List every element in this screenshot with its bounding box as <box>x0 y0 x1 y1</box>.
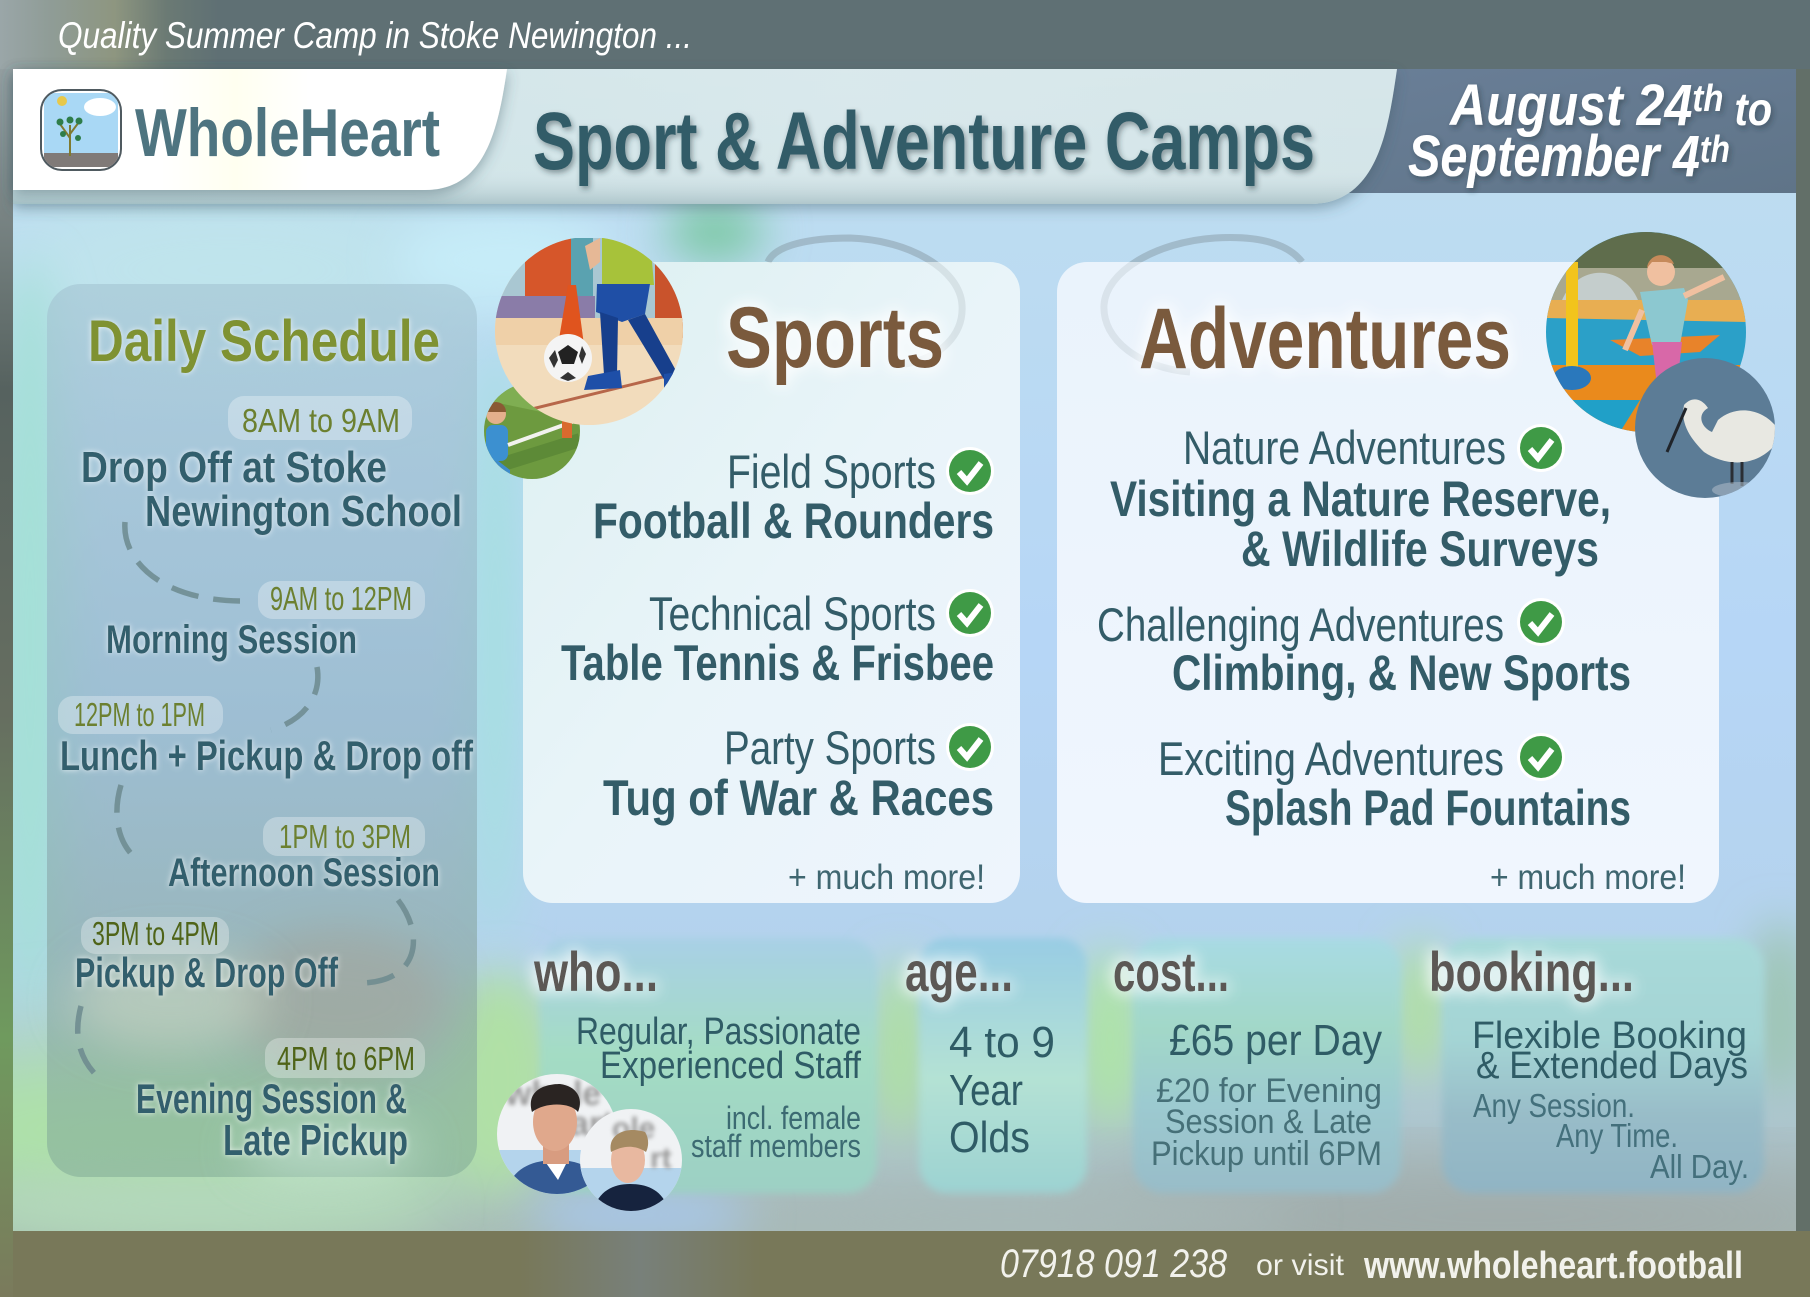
adventures: nature <box>1110 421 1611 577</box>
title: Sport & Adventure Camps <box>533 96 1315 187</box>
photo: staff member two: rt <box>650 1142 672 1175</box>
age: text: Year <box>949 1066 1023 1115</box>
cost: text <box>1151 1016 1382 1173</box>
age: text: Olds <box>949 1113 1030 1162</box>
photo: tug of war <box>484 383 580 479</box>
date text: August 24 <box>1450 73 1730 138</box>
schedule: 8AM: 8AM to 9AM <box>242 402 400 439</box>
photo: staff member one <box>496 1074 618 1196</box>
schedule: 8AM: Drop Off at Stoke <box>81 443 387 492</box>
who: staff <box>576 1011 861 1164</box>
who: staff: incl. female <box>726 1100 861 1136</box>
heading: age: age... <box>905 940 1013 1003</box>
photo: staff member one: art <box>570 1105 613 1143</box>
panel: daily schedule <box>47 284 477 1180</box>
schedule: 9AM: Morning Session <box>106 618 357 662</box>
icon: check marks adventures <box>1517 424 1565 781</box>
who: staff: Experienced Staff <box>600 1045 861 1087</box>
icon: check marks sports <box>946 447 994 771</box>
title band <box>13 69 1397 204</box>
panel: age <box>905 938 1087 1193</box>
age: text <box>949 1018 1055 1162</box>
sports: party <box>603 721 994 826</box>
heading: adventures: Adventures <box>1139 291 1511 387</box>
photo: football <box>495 238 685 426</box>
adventures: nature: Nature Adventures <box>1183 421 1506 474</box>
schedule: 4PM: Late Pickup <box>223 1116 408 1165</box>
footer contact: or visit <box>1256 1249 1345 1282</box>
photo: egret <box>1635 358 1775 498</box>
booking: text: Any Time. <box>1556 1117 1678 1154</box>
schedule: 1PM <box>168 817 440 895</box>
sports: party: Tug of War & Races <box>603 770 994 826</box>
schedule: 1PM: Afternoon Session <box>168 851 440 895</box>
schedule: 8AM: Newington School <box>145 487 462 536</box>
photo: staff member two <box>580 1108 684 1216</box>
background: inner gradient panel <box>13 193 1796 1231</box>
adventures: challenging: Climbing, & New Sports <box>1172 645 1631 701</box>
date text: th <box>1700 129 1730 171</box>
heading: daily schedule: Daily Schedule <box>88 309 440 374</box>
logo tab <box>13 69 507 190</box>
adventures: exciting: Exciting Adventures <box>1158 732 1504 785</box>
adventures: much more: + much more! <box>1490 858 1686 897</box>
heading: booking: booking... <box>1429 940 1634 1003</box>
adventures: nature: & Wildlife Surveys <box>1241 521 1599 577</box>
sports: much more: + much more! <box>788 858 985 897</box>
photo: staff member one: whole <box>504 1075 601 1113</box>
footer contact: 07918 091 238 <box>1000 1242 1228 1286</box>
logo wordmark: WholeHeart <box>135 95 440 171</box>
schedule: 12PM <box>58 696 474 779</box>
schedule: 4PM <box>136 1038 425 1165</box>
schedule: 3PM <box>75 915 339 996</box>
sports: technical <box>561 587 994 691</box>
footer contact <box>1000 1242 1743 1287</box>
schedule: 1PM: 1PM to 3PM <box>279 818 411 855</box>
photo: splash pad <box>1546 232 1746 432</box>
schedule: 3PM: 3PM to 4PM <box>92 915 219 952</box>
adventures: exciting: Splash Pad Fountains <box>1225 780 1631 836</box>
cost: text: Pickup until 6PM <box>1151 1135 1382 1173</box>
cost: text: £65 per Day <box>1169 1016 1382 1065</box>
heading: sports: Sports <box>726 290 944 386</box>
who: staff: staff members <box>691 1128 861 1164</box>
sports: technical: Table Tennis & Frisbee <box>561 635 994 691</box>
booking: text <box>1472 1015 1749 1185</box>
panel: adventures <box>1057 238 1719 903</box>
schedule: 3PM: Pickup & Drop Off <box>75 949 339 996</box>
date text: th <box>1692 78 1723 120</box>
age: text: 4 to 9 <box>949 1018 1055 1067</box>
icon: logo tree <box>40 89 122 171</box>
date text: September 4 <box>1408 124 1756 189</box>
schedule: 4PM: Evening Session & <box>136 1075 407 1122</box>
adventures: challenging <box>1097 598 1631 701</box>
booking: text: Any Session. <box>1473 1087 1635 1124</box>
sports: field <box>593 445 994 549</box>
sports: party: Party Sports <box>724 721 936 774</box>
date text <box>1408 73 1772 189</box>
who: staff: Regular, Passionate <box>576 1011 861 1053</box>
booking: text: & Extended Days <box>1476 1045 1748 1087</box>
heading: cost: cost... <box>1113 940 1229 1003</box>
date block <box>1300 69 1796 193</box>
footer contact: www.wholeheart.football <box>1363 1245 1743 1287</box>
heading: who: who... <box>533 940 658 1003</box>
panel: who <box>496 938 877 1216</box>
adventures: exciting <box>1158 732 1631 836</box>
panel: sports <box>523 238 1020 903</box>
schedule: 8AM <box>81 396 462 536</box>
panel: cost <box>1113 938 1401 1193</box>
adventures: nature: Visiting a Nature Reserve, <box>1110 471 1611 527</box>
schedule: 9AM: 9AM to 12PM <box>270 580 412 617</box>
schedule connectors <box>78 522 413 1082</box>
schedule: 12PM: Lunch + Pickup & Drop off <box>60 732 474 779</box>
booking: text: All Day. <box>1650 1148 1749 1185</box>
sports: field: Field Sports <box>727 445 936 498</box>
schedule: 12PM: 12PM to 1PM <box>74 696 205 733</box>
panel: booking <box>1429 938 1764 1193</box>
strapline: Quality Summer Camp in Stoke Newington ... <box>58 15 692 56</box>
schedule: 4PM: 4PM to 6PM <box>277 1040 415 1077</box>
cost: text: £20 for Evening <box>1156 1072 1382 1110</box>
sports: technical: Technical Sports <box>649 587 936 640</box>
booking: text: Flexible Booking <box>1472 1015 1747 1057</box>
schedule: 9AM <box>106 580 425 662</box>
adventures: challenging: Challenging Adventures <box>1097 598 1504 651</box>
date text: to <box>1723 83 1772 135</box>
cost: text: Session & Late <box>1165 1103 1372 1141</box>
sports: field: Football & Rounders <box>593 493 994 549</box>
photo: staff member two: ole <box>612 1112 655 1145</box>
